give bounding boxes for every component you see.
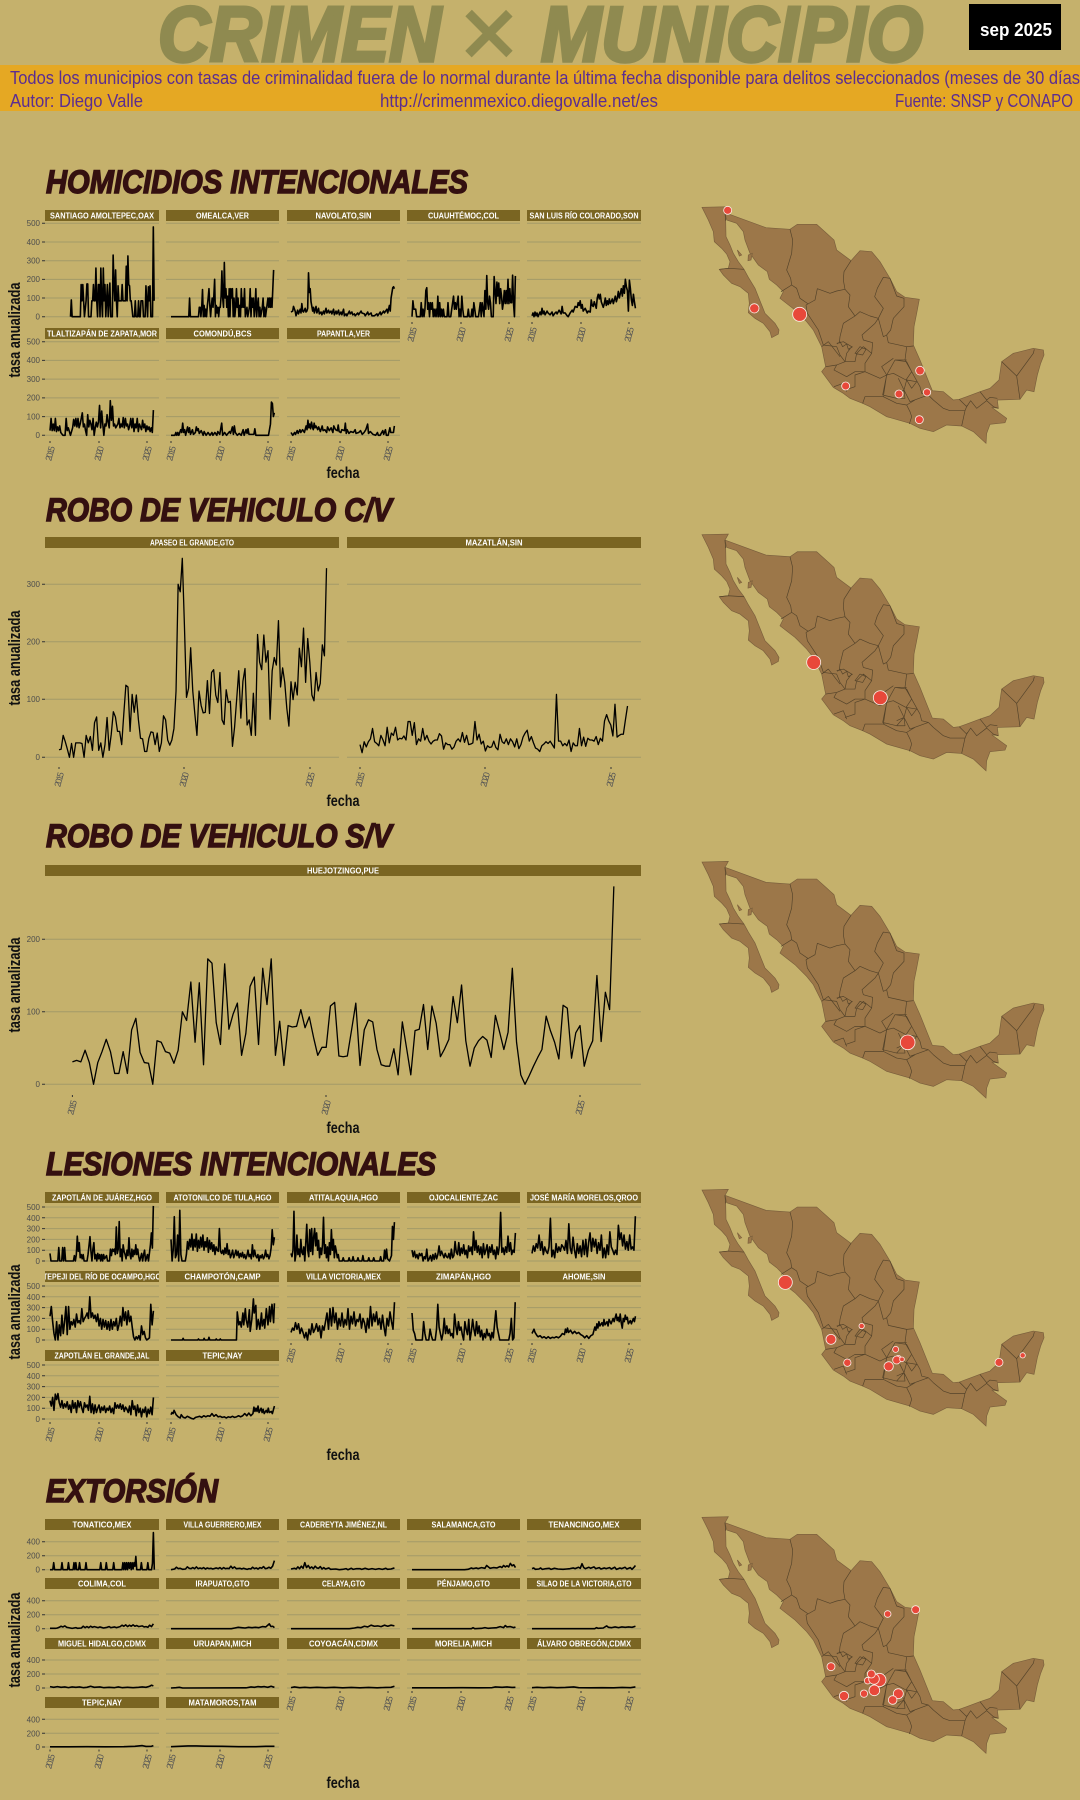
x axis ticks: 2020 xyxy=(333,445,347,462)
y axis labels: 500 xyxy=(27,1361,41,1370)
y axis labels xyxy=(27,219,45,440)
x axis ticks: 2025 xyxy=(381,445,395,462)
panel: Miguel Hidalgo xyxy=(45,1638,159,1688)
y axis labels xyxy=(27,1203,45,1424)
map: robo de vehiculo c/v xyxy=(702,534,1044,771)
panel: Comondú xyxy=(166,328,279,435)
x axis ticks: 2015 xyxy=(52,771,66,788)
x axis ticks: 2015 xyxy=(284,445,298,462)
panel: Irapuato: IRAPUATO,GTO xyxy=(196,1580,250,1588)
panel: Miguel Hidalgo: MIGUEL HIDALGO,CDMX xyxy=(58,1640,147,1648)
heading: LESIONES INTENCIONALES xyxy=(46,1146,437,1182)
panel: Tepic (lesiones) xyxy=(166,1350,279,1419)
x axis ticks: 2020 xyxy=(319,1099,333,1116)
y axis labels: 200 xyxy=(27,275,41,284)
y axis labels: 0 xyxy=(36,1743,41,1752)
x axis ticks: 2015 xyxy=(43,1753,57,1770)
y axis labels xyxy=(27,580,45,762)
x axis ticks: 2015 xyxy=(65,1099,79,1116)
y axis labels: 300 xyxy=(27,1383,41,1392)
panel: Morelia: MORELIA,MICH xyxy=(435,1640,492,1648)
date badge: sep 2025 xyxy=(980,20,1052,40)
panel: Papantla xyxy=(287,328,400,435)
x axis ticks: 2015 xyxy=(525,326,539,343)
date badge xyxy=(969,4,1061,50)
panel: Ojocaliente xyxy=(407,1192,520,1261)
panel: Champotón xyxy=(166,1271,279,1340)
x axis ticks: 2015 xyxy=(164,1753,178,1770)
x axis ticks: 2015 xyxy=(164,1426,178,1443)
panel: Apaseo el Grande xyxy=(45,537,339,757)
x axis ticks: 2025 xyxy=(140,1426,154,1443)
panel: Mazatlán: MAZATLÁN,SIN xyxy=(466,538,523,548)
y axis labels: 200 xyxy=(27,638,41,646)
y axis title: tasa anualizada xyxy=(5,282,24,378)
x axis ticks: 2020 xyxy=(213,445,227,462)
y axis labels: 300 xyxy=(27,1225,41,1234)
y axis labels: 400 xyxy=(27,1538,41,1547)
x axis ticks: 2025 xyxy=(622,326,636,343)
y axis labels: 200 xyxy=(27,1729,41,1738)
x axis ticks: 2020 xyxy=(213,1426,227,1443)
x axis ticks: 2020 xyxy=(177,771,191,788)
y axis labels: 200 xyxy=(27,394,41,403)
x axis ticks: 2025 xyxy=(622,1695,636,1712)
y axis labels: 400 xyxy=(27,1656,41,1665)
panel: Omealca xyxy=(166,210,279,317)
panel: Omealca: OMEALCA,VER xyxy=(196,212,249,220)
x axis ticks: 2020 xyxy=(92,445,106,462)
panel: Tepeji del Río de Ocampo: TEPEJI DEL RÍO DE OCAMPO,HGO xyxy=(43,1272,161,1282)
y axis labels: 0 xyxy=(36,1625,41,1634)
panel: Tepic (extorsión): TEPIC,NAY xyxy=(82,1698,123,1708)
x axis ticks: 2015 xyxy=(43,445,57,462)
y axis labels: 400 xyxy=(27,1293,41,1302)
x axis ticks: 2020 xyxy=(454,1347,468,1364)
y axis labels: 500 xyxy=(27,1282,41,1291)
panel: Atitalaquia: ATITALAQUIA,HGO xyxy=(309,1194,378,1202)
section: homicidios intencionales xyxy=(5,164,641,482)
y axis labels: 300 xyxy=(27,580,41,589)
x axis ticks: 2025 xyxy=(573,1099,587,1116)
panel: Navolato: NAVOLATO,SIN xyxy=(316,212,372,220)
panel: San Luis Río Colorado xyxy=(527,210,641,317)
x axis ticks: 2020 xyxy=(574,326,588,343)
panel: Tepeji del Río de Ocampo xyxy=(43,1271,161,1340)
y axis labels: 0 xyxy=(36,1336,41,1345)
y axis labels: 200 xyxy=(27,1611,41,1620)
x axis title: fecha xyxy=(326,1120,360,1137)
panel: Zapotlán de Juárez xyxy=(45,1192,159,1261)
panel: Tlaltizapán de Zapata xyxy=(45,328,159,435)
y axis labels: 400 xyxy=(27,1715,41,1724)
panel: Tlaltizapán de Zapata: TLALTIZAPÁN DE ZAPATA,MOR xyxy=(47,330,157,338)
panel: Atotonilco de Tula: ATOTONILCO DE TULA,HGO xyxy=(174,1194,272,1202)
panel: Celaya: CELAYA,GTO xyxy=(322,1580,365,1588)
y axis labels: 0 xyxy=(36,1415,41,1424)
x axis ticks: 2020 xyxy=(574,1695,588,1712)
x axis ticks: 2025 xyxy=(261,445,275,462)
y axis labels: 200 xyxy=(27,1314,41,1323)
panel: Salamanca xyxy=(407,1519,520,1570)
panel: Santiago Amoltepec xyxy=(45,210,159,317)
panel: Papantla: PAPANTLA,VER xyxy=(317,330,370,338)
y axis title: tasa anualizada xyxy=(5,937,24,1032)
x axis title: fecha xyxy=(326,465,360,482)
panel: Coyoacán xyxy=(287,1638,400,1688)
panel: Cuauhtémoc xyxy=(407,210,520,317)
panel: Irapuato xyxy=(166,1578,279,1629)
x axis ticks: 2015 xyxy=(405,1695,419,1712)
y axis labels: 500 xyxy=(27,219,41,228)
subtitle band: http://crimenmexico.diegovalle.net/es xyxy=(380,91,658,111)
x axis ticks: 2015 xyxy=(525,1695,539,1712)
y axis labels: 300 xyxy=(27,375,41,384)
x axis title: fecha xyxy=(326,1775,360,1792)
panel: Álvaro Obregón: ÁLVARO OBREGÓN,CDMX xyxy=(537,1640,632,1648)
panel: Álvaro Obregón xyxy=(527,1638,641,1688)
header title xyxy=(158,0,923,89)
subtitle band: Autor: Diego Valle xyxy=(10,91,143,111)
x axis ticks: 2020 xyxy=(213,1753,227,1770)
x axis ticks: 2015 xyxy=(284,1695,298,1712)
x axis ticks: 2025 xyxy=(502,1695,516,1712)
panel: Cuauhtémoc: CUAUHTÉMOC,COL xyxy=(428,212,499,220)
panel: Salamanca: SALAMANCA,GTO xyxy=(432,1520,496,1530)
panel: Tenancingo: TENANCINGO,MEX xyxy=(548,1520,620,1530)
panel: Santiago Amoltepec: SANTIAGO AMOLTEPEC,OAX xyxy=(50,212,155,220)
x axis ticks: 2020 xyxy=(333,1347,347,1364)
y axis labels: 400 xyxy=(27,356,41,365)
panel: Villa Victoria: VILLA VICTORIA,MEX xyxy=(306,1272,382,1282)
x axis ticks xyxy=(43,1691,636,1770)
y axis labels: 100 xyxy=(27,1246,41,1255)
y axis labels: 100 xyxy=(27,1008,41,1016)
panel: Huejotzingo: HUEJOTZINGO,PUE xyxy=(307,866,380,876)
y axis labels: 400 xyxy=(27,238,41,247)
y axis labels: 100 xyxy=(27,1325,41,1334)
y axis labels: 200 xyxy=(27,1235,41,1244)
x axis ticks xyxy=(65,1095,587,1116)
y axis labels xyxy=(27,1538,45,1752)
panel: Colima xyxy=(45,1578,159,1628)
y axis labels: 0 xyxy=(36,431,41,440)
panel: Tepic (lesiones): TEPIC,NAY xyxy=(202,1352,243,1360)
x axis ticks: 2015 xyxy=(405,1347,419,1364)
panel: Apaseo el Grande: APASEO EL GRANDE,GTO xyxy=(150,538,234,548)
x axis ticks: 2025 xyxy=(303,771,317,788)
y axis labels: 0 xyxy=(36,1257,41,1266)
panel: Villa Guerrero xyxy=(166,1519,279,1570)
y axis labels: 100 xyxy=(27,1404,41,1413)
x axis ticks: 2025 xyxy=(502,326,516,343)
y axis labels: 200 xyxy=(27,1552,41,1561)
x axis ticks: 2025 xyxy=(381,1347,395,1364)
x axis ticks xyxy=(43,322,636,462)
panel: San Luis Río Colorado: SAN LUIS RÍO COLORADO,SON xyxy=(530,212,639,220)
x axis title: fecha xyxy=(326,1447,360,1464)
y axis labels: 0 xyxy=(36,753,41,762)
panel: Uruapan: URUAPAN,MICH xyxy=(194,1640,252,1648)
heading: ROBO DE VEHICULO S/V xyxy=(46,818,394,854)
panel: Zimapán xyxy=(407,1271,520,1340)
map: lesiones xyxy=(702,1189,1044,1426)
heading: ROBO DE VEHICULO C/V xyxy=(46,492,394,528)
map: robo de vehiculo s/v xyxy=(702,861,1044,1098)
panel: Pénjamo xyxy=(407,1578,520,1629)
section: lesiones intencionales xyxy=(5,1146,641,1464)
x axis ticks: 2025 xyxy=(502,1347,516,1364)
panel: Zapotlán de Juárez: ZAPOTLÁN DE JUÁREZ,HGO xyxy=(52,1194,152,1202)
panel: José María Morelos: JOSÉ MARÍA MORELOS,QROO xyxy=(530,1194,638,1202)
x axis ticks: 2020 xyxy=(574,1347,588,1364)
panel: Colima: COLIMA,COL xyxy=(78,1580,126,1588)
panel: Atitalaquia xyxy=(287,1192,400,1261)
x axis ticks: 2025 xyxy=(261,1753,275,1770)
panel: Silao de la Victoria: SILAO DE LA VICTORIA,GTO xyxy=(536,1580,632,1588)
x axis ticks: 2015 xyxy=(525,1347,539,1364)
panel: Cadereyta Jiménez xyxy=(287,1519,400,1570)
x axis ticks: 2015 xyxy=(284,1347,298,1364)
panel: Comondú: COMONDÚ,BCS xyxy=(194,330,252,338)
panel: Ahome: AHOME,SIN xyxy=(562,1272,606,1282)
panel: Champotón: CHAMPOTÓN,CAMP xyxy=(184,1272,261,1282)
y axis labels: 400 xyxy=(27,1597,41,1606)
x axis ticks xyxy=(52,767,618,788)
subtitle band xyxy=(0,65,1080,111)
heading: HOMICIDIOS INTENCIONALES xyxy=(46,164,469,200)
y axis labels: 0 xyxy=(36,312,41,322)
panel: Villa Victoria xyxy=(287,1271,400,1340)
panel: Matamoros xyxy=(166,1697,279,1747)
panel: Tonatico xyxy=(45,1519,159,1570)
y axis labels: 500 xyxy=(27,1203,41,1212)
x axis ticks: 2015 xyxy=(164,445,178,462)
y axis labels: 200 xyxy=(27,935,41,944)
panel: Silao de la Victoria xyxy=(527,1578,641,1629)
panel: Cadereyta Jiménez: CADEREYTA JIMÉNEZ,NL xyxy=(300,1520,387,1530)
heading: EXTORSIÓN xyxy=(46,1473,219,1509)
map: extorsión xyxy=(702,1517,1044,1753)
y axis labels: 0 xyxy=(36,1080,41,1089)
y axis labels xyxy=(27,935,45,1089)
panel: José María Morelos xyxy=(527,1192,641,1258)
x axis ticks: 2025 xyxy=(604,771,618,788)
panel: Ahome xyxy=(527,1271,641,1338)
x axis ticks: 2025 xyxy=(381,1695,395,1712)
panel: Uruapan xyxy=(166,1638,279,1688)
panel: Navolato xyxy=(287,210,400,316)
y axis title: tasa anualizada xyxy=(5,1264,24,1360)
panel: Morelia xyxy=(407,1638,520,1688)
y axis labels: 300 xyxy=(27,256,41,266)
y axis labels: 300 xyxy=(27,1304,41,1313)
x axis ticks: 2025 xyxy=(622,1347,636,1364)
panel: Tenancingo xyxy=(527,1519,641,1569)
x axis ticks: 2015 xyxy=(405,326,419,343)
y axis labels: 500 xyxy=(27,338,41,346)
x axis ticks: 2025 xyxy=(140,1753,154,1770)
panel: Atotonilco de Tula xyxy=(166,1192,279,1261)
panel: Celaya xyxy=(287,1578,400,1629)
panel: Huejotzingo xyxy=(45,865,641,1084)
x axis ticks: 2020 xyxy=(478,771,492,788)
panel: Pénjamo: PÉNJAMO,GTO xyxy=(437,1580,490,1588)
y axis labels: 100 xyxy=(27,294,41,303)
y axis labels: 200 xyxy=(27,1670,41,1679)
x axis ticks: 2015 xyxy=(353,771,367,788)
y axis labels: 0 xyxy=(36,1684,41,1693)
section: robo de vehiculo c/v xyxy=(5,492,641,810)
panel: Tepic (extorsión) xyxy=(45,1697,159,1747)
panel: Mazatlán xyxy=(347,537,641,753)
panel: Zapotlán el Grande: ZAPOTLÁN EL GRANDE,JAL xyxy=(54,1352,150,1360)
x axis ticks: 2020 xyxy=(454,1695,468,1712)
section: extorsión xyxy=(5,1473,641,1792)
y axis labels: 200 xyxy=(27,1393,41,1402)
panel: Tonatico: TONATICO,MEX xyxy=(72,1520,132,1530)
x axis ticks: 2020 xyxy=(92,1426,106,1443)
section: robo de vehiculo s/v xyxy=(5,818,641,1137)
x axis ticks: 2015 xyxy=(43,1426,57,1443)
x axis ticks: 2020 xyxy=(92,1753,106,1770)
panel: Ojocaliente: OJOCALIENTE,ZAC xyxy=(429,1194,498,1202)
y axis labels: 400 xyxy=(27,1214,41,1223)
panel: Zimapán: ZIMAPÁN,HGO xyxy=(436,1272,491,1282)
y axis labels: 0 xyxy=(36,1566,41,1575)
x axis ticks: 2020 xyxy=(333,1695,347,1712)
y axis title: tasa anualizada xyxy=(5,610,24,706)
x axis ticks: 2025 xyxy=(140,445,154,462)
y axis title: tasa anualizada xyxy=(5,1592,24,1688)
panel: Zapotlán el Grande xyxy=(45,1350,159,1417)
panel: Coyoacán: COYOACÁN,CDMX xyxy=(309,1640,379,1648)
x axis ticks xyxy=(43,1343,636,1443)
x axis title: fecha xyxy=(326,793,360,810)
x axis ticks: 2020 xyxy=(454,326,468,343)
y axis labels: 100 xyxy=(27,695,41,704)
x axis ticks: 2025 xyxy=(261,1426,275,1443)
y axis labels: 100 xyxy=(27,412,41,422)
panel: Matamoros: MATAMOROS,TAM xyxy=(188,1698,257,1708)
y axis labels: 400 xyxy=(27,1372,41,1381)
map: homicidios xyxy=(702,206,1044,443)
panel: Villa Guerrero: VILLA GUERRERO,MEX xyxy=(184,1520,262,1530)
